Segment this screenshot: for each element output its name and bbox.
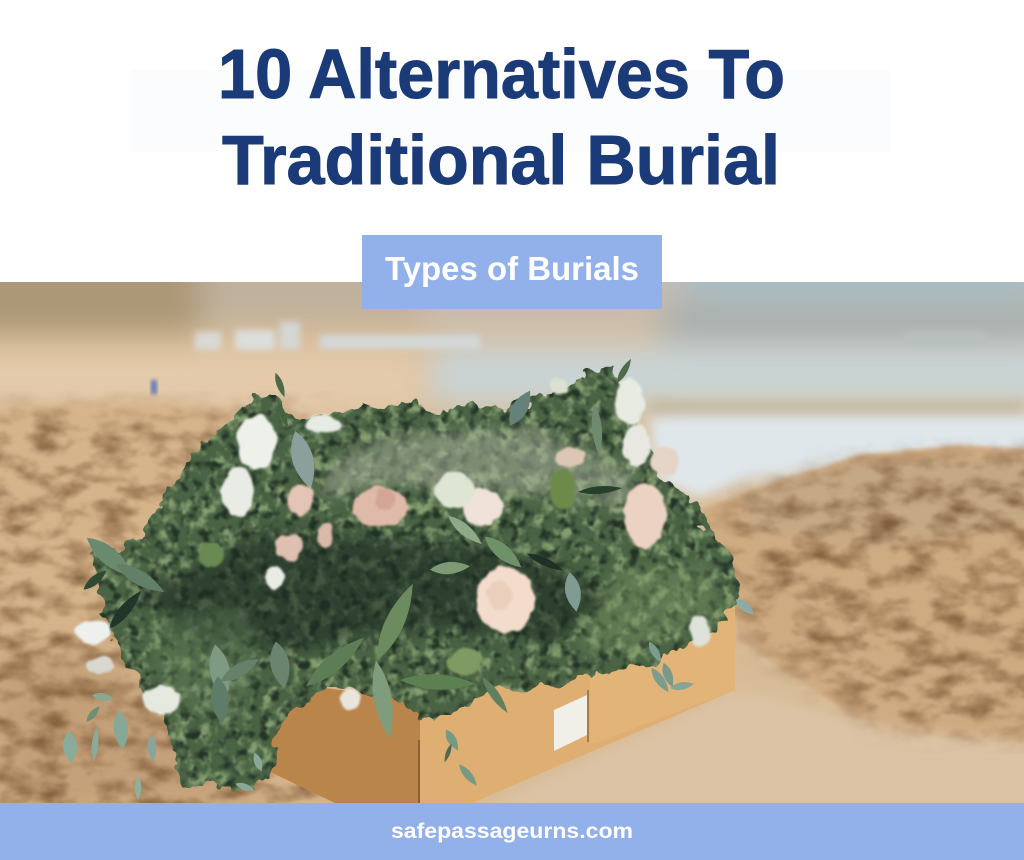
title: Traditional Burial — [222, 121, 780, 199]
title: 10 Alternatives To — [218, 35, 785, 113]
large leaves — [61, 357, 757, 800]
flowers — [75, 377, 711, 714]
photo background: sky, sea and sand — [0, 250, 1024, 803]
bouquet foliage — [61, 357, 757, 800]
subtitle badge: Types of Burials — [385, 250, 639, 287]
title — [218, 35, 785, 199]
photo: flower-covered wooden coffin on a beach — [0, 282, 1024, 803]
sand dunes — [0, 380, 1024, 840]
subtitle badge — [362, 235, 662, 309]
sand texture: right dune — [710, 450, 1024, 740]
footer bar: safepassageurns.com — [391, 820, 633, 843]
faint title backdrop — [131, 70, 891, 152]
footer bar — [0, 803, 1024, 860]
wooden box — [262, 600, 735, 803]
sand texture: left dune — [0, 412, 330, 840]
